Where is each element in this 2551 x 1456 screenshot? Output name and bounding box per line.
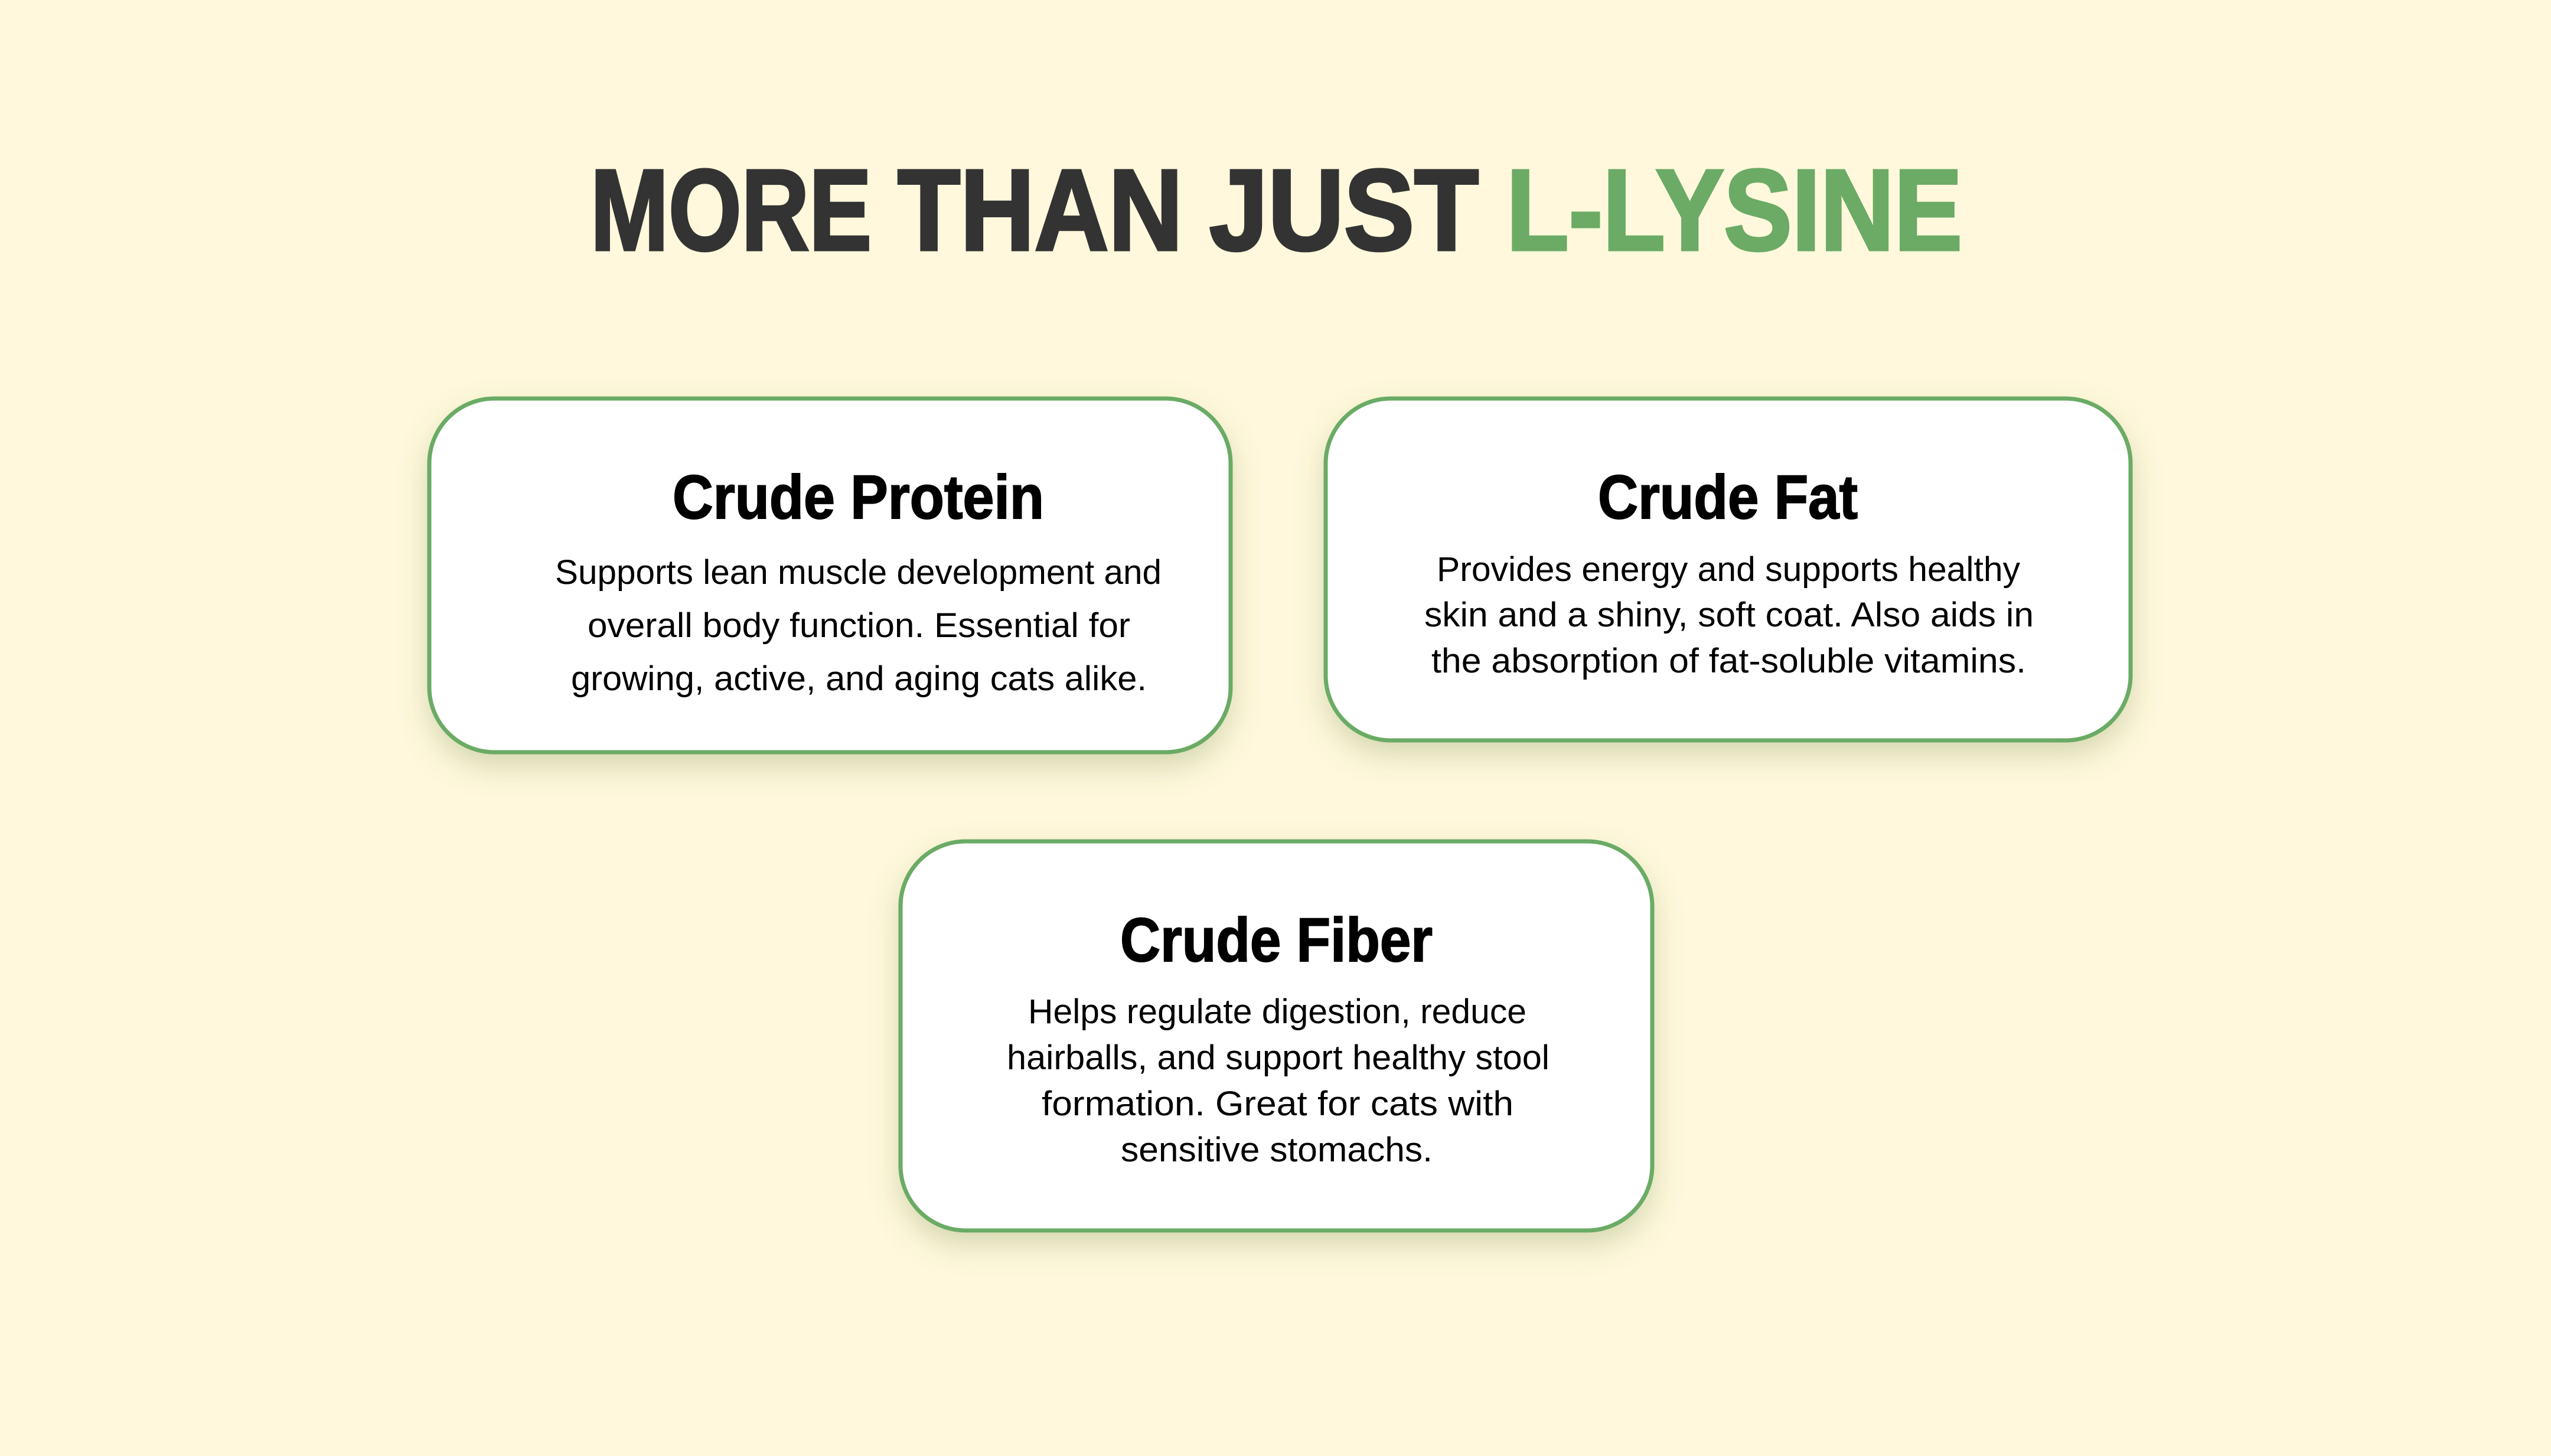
panel: crude protein bbox=[429, 399, 1231, 752]
title: L-LYSINE bbox=[1506, 146, 1962, 275]
text block: crude protein description: overall body function. Essential for bbox=[588, 606, 1130, 645]
text block: crude fat description bbox=[1424, 550, 2034, 680]
text block: crude fiber description: Helps regulate digestion, reduce bbox=[1028, 993, 1526, 1031]
title: JUST bbox=[1209, 146, 1479, 275]
text block: crude fat description: Provides energy and supports healthy bbox=[1437, 550, 2020, 589]
heading: crude protein: Crude Protein bbox=[673, 463, 1044, 532]
title bbox=[591, 146, 1962, 275]
text block: crude fiber description: sensitive stomachs. bbox=[1121, 1131, 1433, 1169]
title: MORE bbox=[591, 146, 872, 275]
text block: crude fat description: skin and a shiny, soft coat. Also aids in bbox=[1424, 596, 2034, 634]
heading: crude fat: Crude Fat bbox=[1598, 463, 1858, 532]
text block: crude fiber description bbox=[1007, 993, 1549, 1169]
text block: crude protein description: Supports lean muscle development and bbox=[555, 553, 1162, 592]
panel: crude fiber bbox=[901, 841, 1652, 1230]
text block: crude protein description: growing, active, and aging cats alike. bbox=[571, 660, 1147, 698]
heading: crude fiber: Crude Fiber bbox=[1120, 906, 1433, 975]
title: THAN bbox=[898, 146, 1183, 275]
text block: crude fiber description: formation. Great for cats with bbox=[1042, 1085, 1513, 1123]
text block: crude fat description: the absorption of fat-soluble vitamins. bbox=[1431, 642, 2026, 680]
panel: crude fat bbox=[1326, 399, 2131, 740]
text block: crude fiber description: hairballs, and support healthy stool bbox=[1007, 1039, 1549, 1077]
text block: crude protein description bbox=[555, 553, 1162, 698]
